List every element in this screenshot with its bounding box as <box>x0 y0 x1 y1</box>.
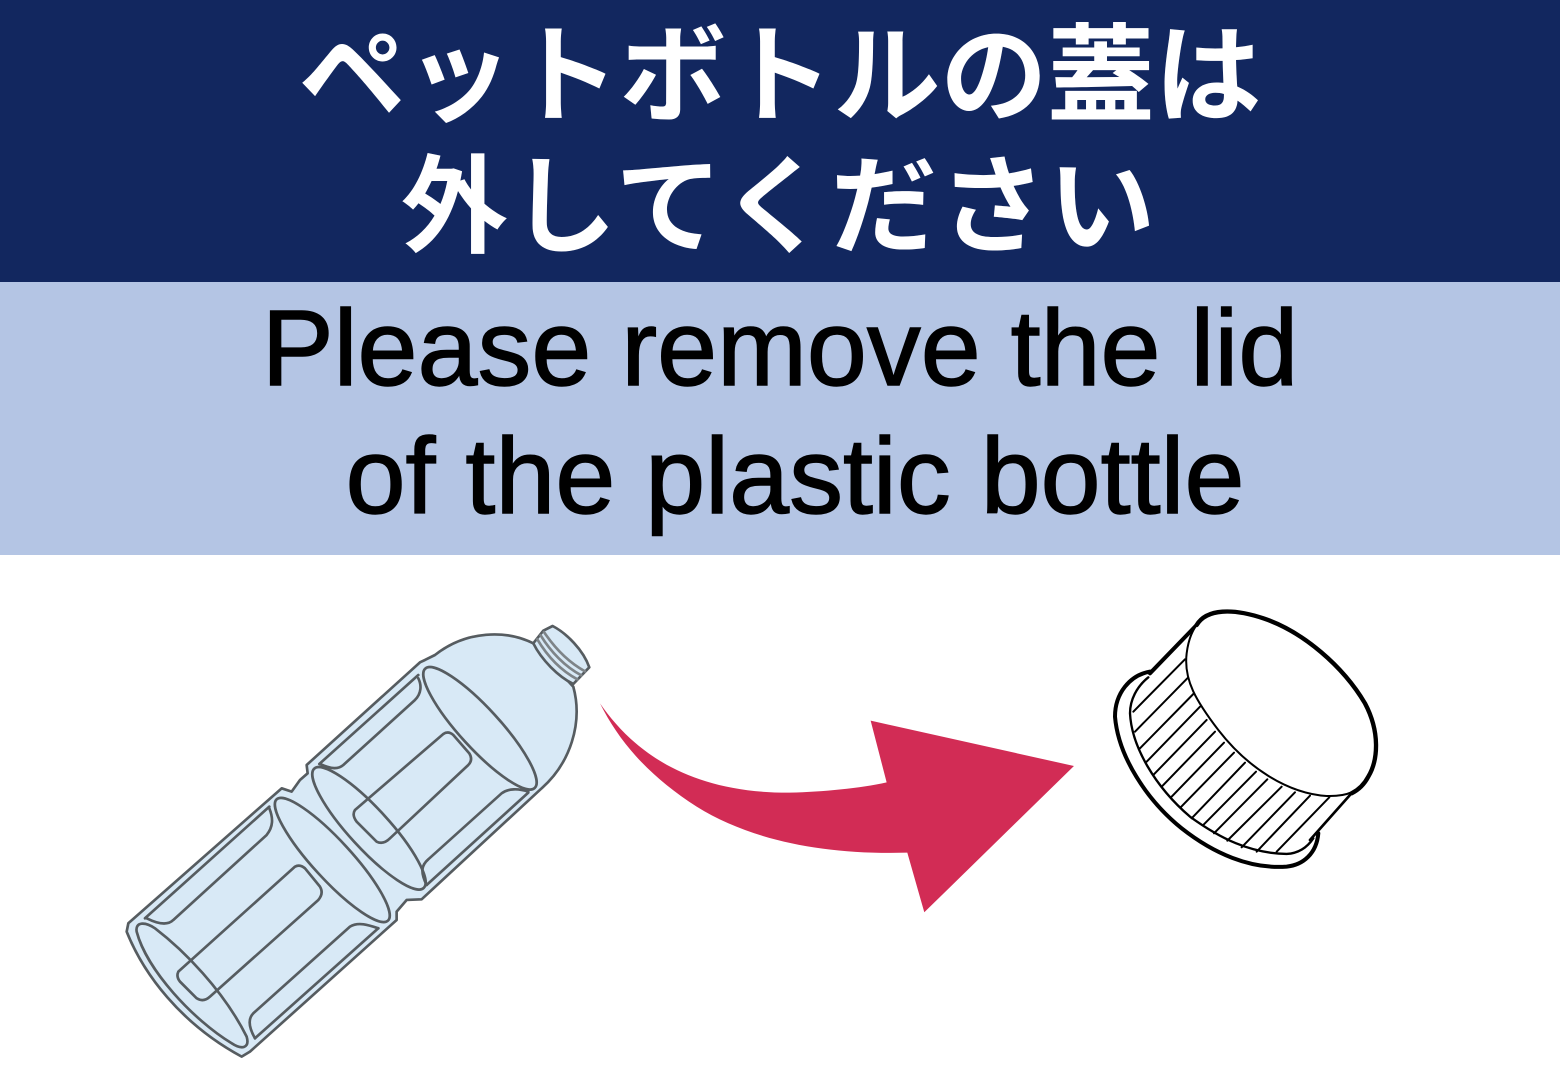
middle ellipse A <box>300 755 438 902</box>
heading: English line 2: of the plastic bottle <box>346 415 1244 536</box>
flange outer rim <box>1115 672 1318 867</box>
cap ribs <box>1133 659 1329 852</box>
icon: bottle cap <box>1115 612 1376 867</box>
heading: Japanese line 2: 外してください <box>401 147 1157 267</box>
lower panel lines <box>147 808 272 924</box>
upper label recess <box>354 733 471 843</box>
bottle body outline <box>127 634 577 1057</box>
lower contour lines <box>145 807 378 1038</box>
upper panel lines <box>320 678 420 768</box>
heading: Japanese line 1: ペットボトルの蓋は <box>298 16 1262 136</box>
upper contour lines <box>319 675 528 885</box>
lower label recess <box>177 866 322 1000</box>
upper shoulder ellipse <box>411 655 549 802</box>
cap top face <box>1186 612 1376 796</box>
skirt inner line <box>1130 677 1313 854</box>
icon: plastic bottle <box>127 626 589 1057</box>
heading: English line 1: Please remove the lid <box>262 287 1298 408</box>
middle ellipse B <box>262 786 402 934</box>
lower ellipse <box>136 924 247 1047</box>
cap side edges <box>1150 625 1197 673</box>
arrow: curved red arrow <box>600 703 1074 912</box>
bottle neck and cap thread <box>533 626 589 684</box>
panel: Japanese heading band <box>0 0 1560 282</box>
panel: English heading band <box>0 282 1560 555</box>
cap top thick rim <box>1197 612 1376 793</box>
